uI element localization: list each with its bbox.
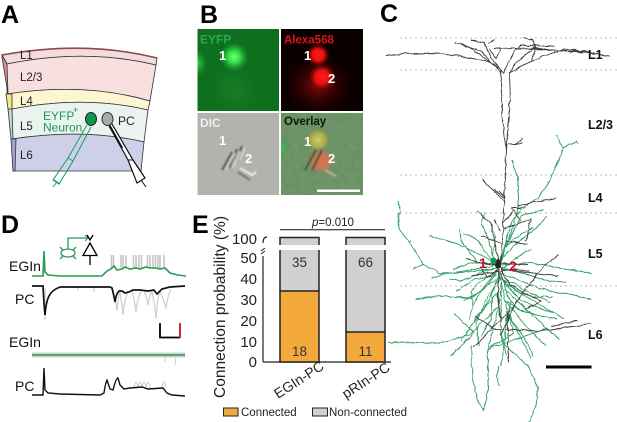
image: Overlay (272, 113, 363, 195)
image: Alexa568 (281, 29, 363, 117)
panel A: cortex schematic (1, 1, 157, 187)
traces: EGIn with evoked spikes (32, 251, 186, 276)
traces: PC depolarizing (32, 368, 185, 396)
label B: B (200, 1, 218, 29)
panel C: reconstructed neurons (380, 0, 617, 422)
traces: PC inward currents (32, 286, 185, 320)
cortical layers (2, 48, 157, 171)
image: EYFP: 1 (219, 48, 226, 63)
soma markers: 1 (479, 255, 487, 271)
PC label: PC (118, 114, 135, 128)
label C: C (380, 0, 398, 28)
layer labels: L4 (588, 191, 603, 205)
image: Overlay: 1 (304, 134, 311, 149)
traces: EGIn flat (32, 355, 185, 365)
soma markers (479, 255, 517, 274)
panel B: microscopy images (189, 1, 363, 195)
legend: Connected (241, 407, 297, 419)
label A: A (1, 1, 19, 29)
x axis labels (271, 358, 393, 402)
EYFP neuron label: Neuron (43, 120, 82, 134)
y axis: 30 (240, 292, 257, 309)
y axis (232, 231, 391, 371)
bar: pRIn-PC: 66 (358, 255, 373, 270)
p value bracket (280, 217, 385, 230)
layer labels: L1 (588, 48, 603, 62)
y axis: 0 (249, 354, 257, 371)
soma markers: 2 (509, 258, 517, 274)
layer labels: L1 (20, 50, 33, 62)
x axis labels: EGIn-PC (271, 358, 327, 402)
layer labels: L5 (20, 121, 33, 133)
y axis: 100 (232, 231, 257, 248)
label D: D (1, 211, 19, 239)
trace labels: EGIn (9, 258, 41, 274)
image: DIC: 1 (219, 133, 226, 148)
legend: Non-connected (329, 407, 407, 419)
panel D: electrophysiology traces (1, 211, 186, 396)
image: Alexa568: 1 (304, 48, 311, 63)
bar: pRIn-PC (346, 238, 385, 362)
image: DIC: 2 (245, 151, 252, 166)
EYFP neuron label: + (73, 105, 78, 115)
green neuron arbor (387, 134, 590, 422)
legend (224, 407, 407, 419)
layer labels: L6 (588, 328, 603, 342)
image: Overlay: Overlay (284, 116, 327, 128)
panel E: connection probability bar chart (192, 211, 407, 419)
trace labels: PC (15, 378, 34, 394)
dark neuron arbor (385, 37, 608, 362)
image: DIC (198, 113, 279, 195)
bar: EGIn-PC: 35 (292, 255, 307, 270)
y axis: 20 (240, 313, 257, 330)
scale bar: black and red (160, 323, 180, 338)
layer labels: L5 (588, 247, 603, 261)
layer dashed boundaries (400, 38, 617, 286)
bar: pRIn-PC: 11 (358, 344, 373, 359)
image: EYFP: EYFP (200, 32, 231, 46)
layer labels (588, 48, 613, 342)
p value bracket: p=0.010 (311, 217, 354, 229)
scale bar (546, 366, 592, 368)
layer labels (20, 50, 42, 162)
layer labels: L2/3 (20, 72, 42, 84)
trace labels: PC (15, 291, 34, 307)
layer labels: L4 (20, 96, 33, 108)
y axis: 10 (240, 334, 257, 351)
EYFP neuron label: EYFP (43, 109, 74, 123)
trace labels: EGIn (9, 334, 41, 350)
x axis labels: pRIn-PC (339, 359, 393, 402)
layer labels: L2/3 (588, 118, 613, 132)
y axis title: Connection probability (%) (212, 216, 229, 398)
trace labels (9, 258, 41, 394)
y axis: 40 (240, 271, 257, 288)
layer labels: L6 (20, 150, 33, 162)
bar: EGIn-PC (280, 238, 319, 362)
icon: circuit schematic (60, 235, 97, 265)
image: DIC: DIC (200, 116, 221, 130)
bar: EGIn-PC: 18 (292, 344, 307, 359)
icon: green neuron and pipette (53, 112, 96, 187)
EYFP neuron label (43, 105, 82, 134)
image: Overlay: 2 (328, 151, 335, 166)
image: EYFP (198, 29, 279, 111)
icon: gray PC and pipette (102, 112, 146, 187)
y axis: 50 (240, 250, 257, 267)
label E: E (192, 211, 209, 239)
image: Alexa568: Alexa568 (284, 34, 334, 46)
image: Alexa568: 2 (328, 71, 335, 86)
